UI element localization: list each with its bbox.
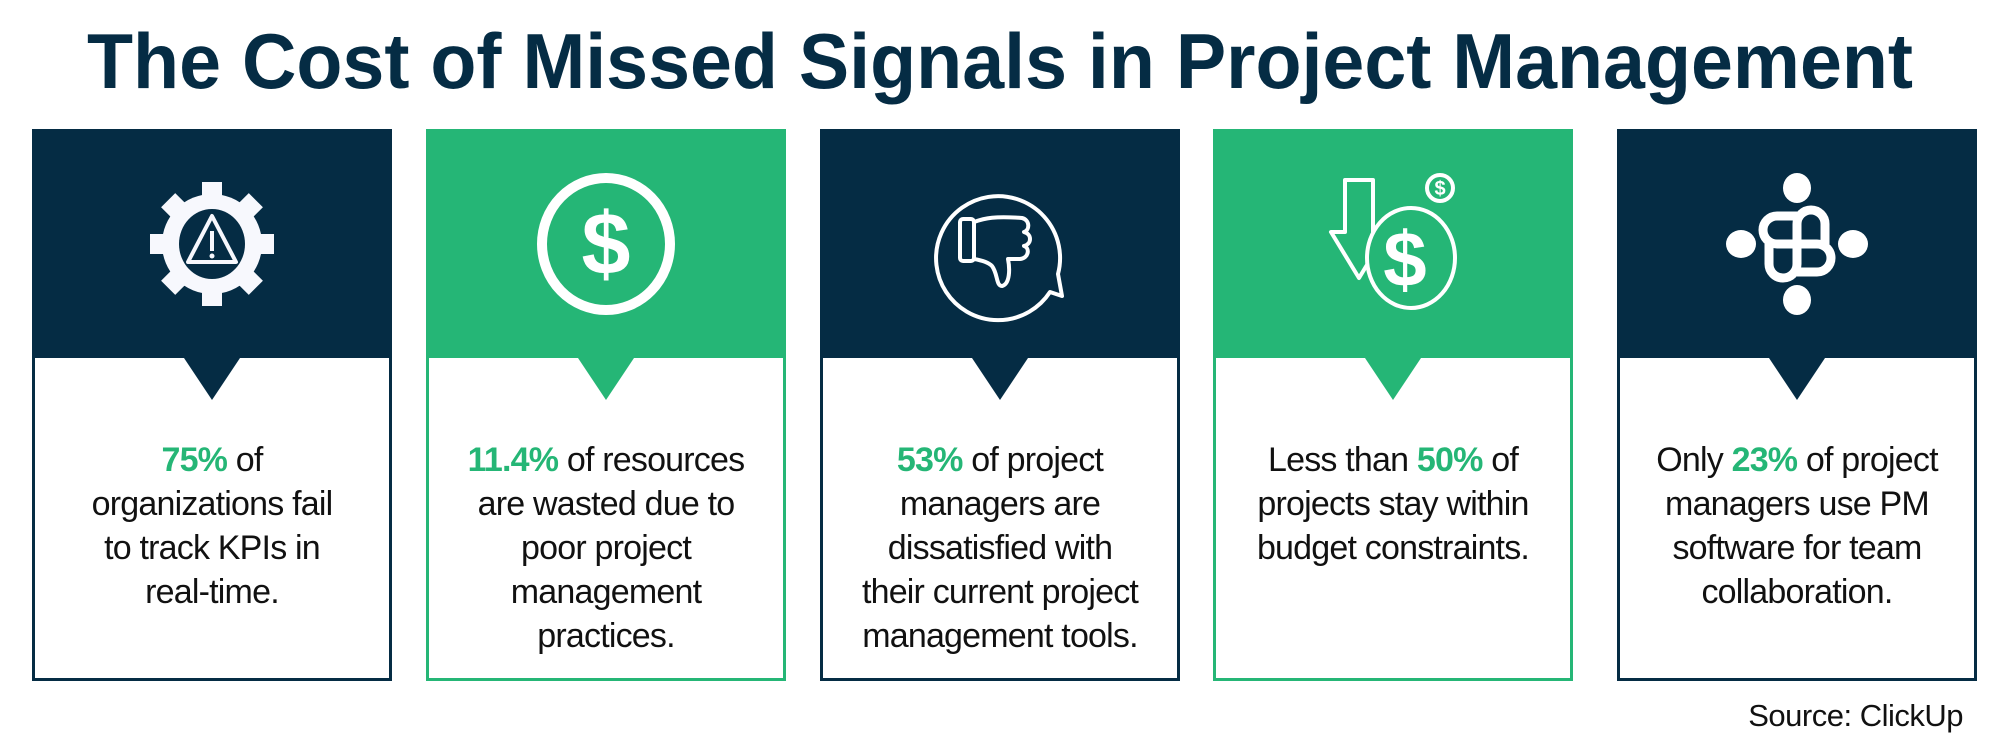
icon: team collaboration xyxy=(1726,173,1868,315)
text: stat 75%: to track KPIs in xyxy=(104,529,320,567)
text: stat 75% xyxy=(92,441,332,611)
pointer xyxy=(1365,358,1421,400)
text: stat 11.4%: practices. xyxy=(537,617,675,655)
text: stat 53%: their current project xyxy=(862,573,1138,611)
panel: collaboration xyxy=(1617,129,1977,681)
text: stat 23%: software for team xyxy=(1672,529,1922,567)
text: stat 50% xyxy=(1257,441,1529,567)
icon: thumbs down speech bubble xyxy=(934,194,1064,322)
text: stat 23% xyxy=(1656,441,1938,611)
pointer xyxy=(184,358,240,400)
pointer xyxy=(578,358,634,400)
text: stat 11.4%: poor project xyxy=(521,529,691,567)
text: stat 50%: projects stay within xyxy=(1257,485,1529,523)
icon: dollar circle xyxy=(537,173,675,315)
text: stat 11.4%: 11.4% of resources xyxy=(468,441,744,479)
text: stat 23%: managers use PM xyxy=(1665,485,1929,523)
text: stat 53%: managers are xyxy=(900,485,1100,523)
text: stat 50%: budget constraints. xyxy=(1257,529,1529,567)
source: Source: ClickUp xyxy=(1748,698,1963,733)
text: stat 11.4%: management xyxy=(511,573,701,611)
text: stat 23%: Only 23% of project xyxy=(1656,441,1938,479)
text: stat 53%: management tools. xyxy=(862,617,1138,655)
text: stat 75%: real-time. xyxy=(145,573,279,611)
text: stat 11.4%: are wasted due to xyxy=(478,485,734,523)
panel: resources xyxy=(426,129,786,681)
panel: dissatisfied xyxy=(820,129,1180,681)
panel: budget xyxy=(1213,129,1573,681)
text: stat 50%: Less than 50% of xyxy=(1268,441,1518,479)
icon: down arrow and coins xyxy=(1328,173,1457,310)
icon: down arrow and coins: $ xyxy=(1383,215,1427,303)
icon: dollar circle: $ xyxy=(582,194,630,293)
text: stat 53% xyxy=(862,441,1139,655)
icon: gear with warning xyxy=(150,182,274,306)
text: stat 53%: 53% of project xyxy=(897,441,1103,479)
text: stat 11.4% xyxy=(468,441,744,655)
title: The Cost of Missed Signals in Project Management xyxy=(87,17,1913,105)
panel: KPIs xyxy=(32,129,392,681)
text: stat 23%: collaboration. xyxy=(1701,573,1893,611)
text: stat 75%: 75% of xyxy=(161,441,263,479)
text: stat 75%: organizations fail xyxy=(92,485,332,523)
pointer xyxy=(1769,358,1825,400)
text: stat 53%: dissatisfied with xyxy=(888,529,1112,567)
pointer xyxy=(972,358,1028,400)
icon: down arrow and coins: $ xyxy=(1434,178,1446,200)
